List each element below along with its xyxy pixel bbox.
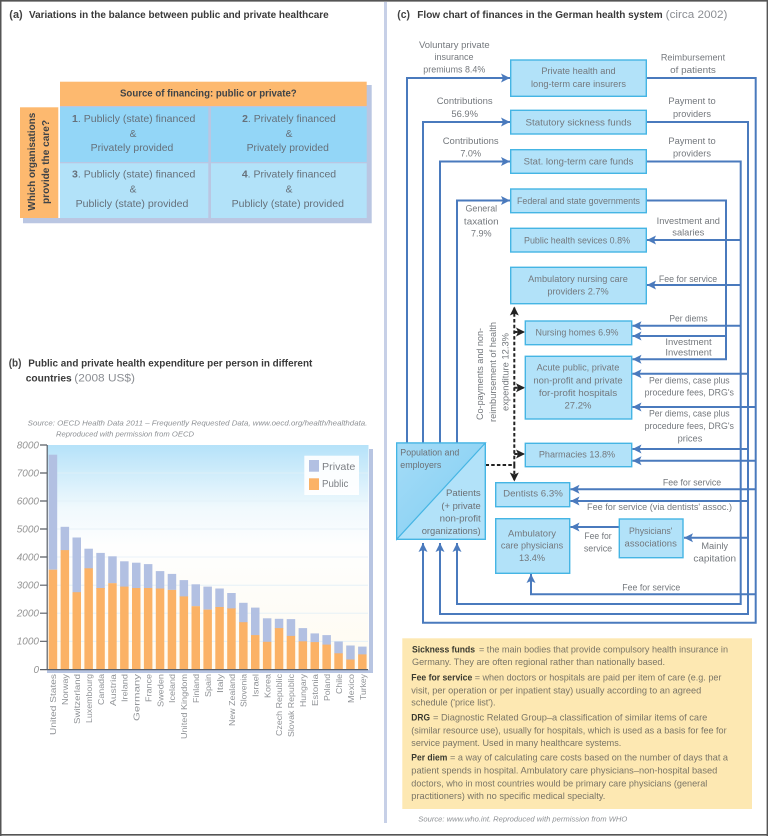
cell 3: & (130, 185, 137, 196)
box: private insurers: Private health and (541, 66, 616, 77)
box: hospitals: for-profit hospitals (539, 388, 617, 399)
dashed co-payment arrows (486, 306, 525, 482)
y axis labels: 4000 (17, 552, 39, 564)
box: population and patients: organizations) (422, 526, 481, 537)
country labels: Canada (96, 674, 106, 705)
country labels: France (144, 674, 154, 702)
arrow: sickness fund contributions (423, 122, 510, 443)
flow labels left: General (465, 204, 497, 215)
glossary: fee for service: = when doctors or hospitals are paid per item of care (e.g. per (475, 673, 721, 683)
box: pharmacies (525, 443, 632, 467)
box: physicians associations: Physicians' (629, 526, 672, 537)
heading (a): Variations in the balance between public and private healthcare (29, 9, 329, 21)
flow labels right: prices (678, 434, 703, 445)
flow labels left: taxation (464, 216, 499, 227)
box: physicians associations (619, 519, 683, 558)
box: hospitals: Acute public, private (537, 363, 619, 374)
box: population and patients: Population and (400, 447, 459, 458)
glossary callout (402, 638, 752, 809)
y axis labels (16, 440, 39, 676)
arrow: public health services (647, 239, 741, 241)
heading (b): countries (26, 372, 72, 384)
arrow: long-term care payments (457, 162, 741, 604)
box: pharmacies: Pharmacies 13.8% (539, 450, 616, 461)
flow labels right: Fee for service (663, 477, 721, 488)
arrow: long-term care contributions (440, 162, 510, 443)
box: nursing homes (525, 321, 632, 345)
flow labels right: Fee for service (659, 274, 717, 285)
box: governments (511, 189, 646, 213)
matrix row header: Which organisations (27, 112, 38, 211)
arrow: sickness fund payments (440, 122, 748, 614)
heading (b): (b) (9, 358, 22, 370)
flow labels right: providers (673, 109, 711, 120)
box: nursing homes: Nursing homes 6.9% (536, 328, 619, 339)
arrow: pharmacies 2 (632, 460, 756, 462)
country labels: New Zealand (227, 674, 237, 726)
flow labels right: Fee for (584, 531, 612, 542)
box: hospitals (525, 356, 632, 419)
heading (c): (c) (397, 9, 410, 21)
arrow: fee for service to physicians (531, 574, 756, 594)
glossary: DRG: DRG (411, 712, 430, 722)
glossary: sickness funds: = the main bodies that provide compulsory health insurance in (479, 645, 728, 655)
cell 3: 3. Publicly (state) financed (72, 170, 196, 181)
flow labels left: Contributions (437, 96, 493, 107)
arrow: dentists association fee (570, 500, 748, 502)
box: population and patients: employers (400, 460, 441, 471)
y axis labels: 5000 (17, 524, 39, 536)
flow labels left: insurance (434, 52, 474, 63)
country labels: Sweden (156, 674, 166, 707)
box: statutory sickness funds (511, 110, 646, 134)
matrix shadow (23, 85, 372, 223)
flow labels left: Voluntary private (419, 40, 490, 51)
country labels: Iceland (167, 674, 177, 703)
flow labels right: of patients (670, 65, 716, 76)
country labels: Czech Republic (274, 673, 284, 736)
panel: (c) flow chart (397, 9, 756, 824)
private bars (49, 455, 367, 660)
arrow: pharmacies 1 (632, 448, 748, 450)
heading (c): (circa 2002) (666, 9, 727, 21)
box: population and patients (397, 443, 485, 539)
box: ambulatory nursing: Ambulatory nursing care (528, 274, 628, 285)
rotated co-payments label: Co-payments and non- (475, 328, 486, 420)
panel: (a) public/private matrix (9, 9, 372, 223)
country labels: United States (48, 674, 58, 735)
box: population and patients: Patients (446, 488, 481, 499)
cell 4 (211, 163, 367, 218)
flow labels right (584, 53, 736, 593)
cell 4: & (286, 185, 293, 196)
flow labels right: Payment to (668, 136, 716, 147)
flow labels left: 7.0% (460, 149, 481, 160)
glossary: DRG (411, 712, 727, 748)
cell 4: 4. Privately financed (242, 170, 336, 181)
box: dentists: Dentists 6.3% (503, 489, 563, 500)
y axis labels: 3000 (17, 580, 39, 592)
axes (40, 445, 368, 670)
glossary: DRG: = Diagnostic Related Group–a classification of similar items of care (433, 712, 707, 722)
country labels: Slovak Republic (286, 673, 296, 737)
arrow: hospital per diems 2 (632, 406, 756, 408)
country labels: Spain (203, 674, 213, 697)
cell 2: Privately provided (247, 143, 329, 154)
box: ambulatory physicians: Ambulatory (508, 528, 556, 539)
country labels: Luxembourg (84, 674, 94, 723)
glossary: sickness funds: Germany. They are often regional rather than nationally based. (412, 657, 665, 667)
flow labels right: Investment and (657, 216, 720, 227)
country labels: Switzerland (72, 674, 82, 724)
glossary: per diem: Per diem (411, 753, 447, 763)
arrow: voluntary premiums (407, 78, 510, 443)
flow labels right: procedure fees, DRG's (645, 388, 734, 399)
legend: Public (322, 478, 348, 490)
country labels: Korea (262, 674, 272, 698)
country labels: Norway (60, 673, 70, 705)
matrix row header (20, 107, 58, 218)
arrow: government investment to hospitals (632, 200, 726, 359)
glossary: per diem: = a way of calculating care costs based on the number of days that a (450, 753, 729, 763)
legend (304, 456, 359, 495)
matrix header (60, 82, 367, 106)
cell 3: Publicly (state) provided (76, 199, 189, 210)
cell 1: Privately provided (91, 143, 174, 154)
box: private insurers: long-term care insurers (531, 79, 626, 90)
arrow: nursing home per diems (632, 325, 741, 327)
flow labels left: Contributions (443, 136, 499, 147)
country labels: Italy (215, 673, 225, 693)
flow labels right: providers (673, 149, 711, 160)
cell 1: 1. Publicly (state) financed (72, 114, 196, 125)
glossary: per diem: patient spends in hospital. Ambulatory care physicians–non-hospital based (411, 766, 717, 776)
arrow: dentists fee (570, 488, 756, 490)
box: dentists (496, 483, 570, 507)
glossary: per diem: doctors, who in most countries would be primary care physicians (general (411, 778, 707, 788)
box: ambulatory nursing: providers 2.7% (547, 287, 609, 298)
source note: Source: OECD Health Data 2011 – Frequently Requested Data, www.oecd.org/health/healthdata. (28, 419, 367, 428)
country labels: Germany (132, 673, 142, 721)
country labels: Ireland (120, 674, 130, 702)
glossary: fee for service (411, 673, 721, 708)
arrow: physicians association capitation (684, 537, 748, 539)
cell 3 (60, 163, 208, 218)
flow labels right: capitation (693, 554, 736, 565)
heading (b): Public and private health expenditure per person in different (28, 358, 313, 370)
box: ambulatory physicians (496, 519, 570, 573)
flow labels right: Investment (665, 347, 712, 358)
y axis labels: 0 (33, 665, 39, 676)
country labels: Finland (191, 674, 201, 703)
flow labels right: salaries (672, 228, 704, 239)
box: population and patients: (+ private (441, 501, 481, 512)
flow labels right: Reimbursement (661, 53, 725, 64)
source note (28, 419, 367, 439)
WHO source note: Source: www.who.int. Reproduced with permission from WHO (418, 815, 627, 824)
flow labels right: Investment (665, 337, 712, 348)
box: population and patients: non-profit (440, 513, 481, 524)
country labels: Israel (250, 674, 260, 697)
flow labels right: Per diems, case plus (649, 408, 730, 419)
box: private insurers (511, 60, 646, 96)
glossary: DRG: (similar resource use), usually for hospitals, which is used as a basis for fee for (411, 725, 727, 735)
arrow: reimbursement of patients (423, 78, 756, 623)
arrow: general taxation (457, 200, 510, 443)
flow labels right: Payment to (668, 96, 716, 107)
flow labels left (419, 40, 499, 240)
box: long-term care funds (511, 150, 646, 173)
rotated co-payments label: expenditure 12.3% (500, 333, 512, 411)
box: long-term care funds: Stat. long-term care funds (524, 157, 634, 168)
box: ambulatory nursing (511, 267, 646, 304)
country labels: Mexico (346, 674, 356, 703)
country labels: Turkey (358, 673, 368, 700)
box: hospitals: 27.2% (564, 400, 592, 411)
glossary: per diem (411, 753, 729, 801)
y axis labels: 2000 (16, 608, 39, 620)
flow lines and arrows (407, 78, 756, 623)
flow labels right: Mainly (701, 541, 728, 552)
box: governments: Federal and state governments (517, 196, 640, 207)
box: public health services: Public health sevices 0.8% (524, 235, 630, 246)
bar chart (16, 440, 373, 739)
box: public health services (511, 228, 646, 252)
box: physicians associations: associations (625, 538, 677, 549)
y axis labels: 8000 (17, 440, 39, 452)
country labels: Estonia (310, 674, 320, 706)
arrow: hospital per diems 1 (632, 373, 748, 375)
arrow: associations to physicians (570, 526, 619, 528)
flow labels right: Per diems (669, 313, 708, 324)
arrow: investment to nursing homes (632, 335, 726, 337)
country labels: Hungary (298, 673, 308, 707)
flow labels left: 56.9% (451, 109, 479, 120)
cell 1 (60, 107, 208, 162)
flow labels left: premiums 8.4% (423, 65, 486, 76)
glossary: sickness funds (412, 645, 728, 667)
glossary: per diem: practitioners) with no specific medical specialty. (411, 791, 605, 801)
country labels: Slovenia (238, 674, 248, 707)
legend: Private (322, 461, 355, 473)
flow labels right: Fee for service (via dentists' assoc.) (587, 502, 732, 513)
panel: (b) expenditure chart (9, 358, 373, 739)
box: hospitals: non-profit and private (533, 375, 623, 386)
rotated co-payments label: reimbursement of health (488, 322, 499, 422)
y axis labels: 6000 (17, 496, 39, 508)
y axis labels: 1000 (17, 636, 39, 648)
cell 2 (211, 107, 367, 162)
glossary: fee for service: visit, per operation or per inpatient stay) usually according to an agreed (411, 685, 701, 695)
glossary: sickness funds: Sickness funds (412, 645, 475, 655)
heading (a): (a) (9, 9, 23, 21)
flow labels right: Fee for service (622, 582, 680, 593)
glossary: fee for service: schedule ('price list'). (411, 698, 496, 708)
y axis labels: 7000 (17, 468, 39, 480)
country labels: Austria (108, 674, 118, 706)
cell 4: Publicly (state) provided (232, 199, 344, 210)
rotated co-payments label (475, 322, 512, 422)
flow labels right: service (584, 544, 612, 555)
arrow: ambulatory nursing (647, 284, 741, 286)
matrix row header: provide the care? (41, 120, 52, 204)
country labels: Chile (334, 674, 344, 694)
cell 2: 2. Privately financed (242, 114, 336, 125)
cell 2: & (286, 129, 293, 140)
box: statutory sickness funds: Statutory sickness funds (526, 117, 632, 128)
country labels (48, 673, 368, 739)
glossary: DRG: service payment. Used in many healthcare systems. (411, 738, 621, 748)
source note: Reproduced with permission from OECD (56, 430, 195, 439)
flow labels left: 7.9% (471, 229, 492, 240)
country labels: United Kingdom (179, 674, 189, 739)
cell 1: & (130, 129, 137, 140)
heading (b) (9, 358, 313, 384)
country labels: Poland (322, 674, 332, 701)
flow labels right: Per diems, case plus (649, 375, 730, 386)
flow labels right: procedure fees, DRG's (645, 421, 734, 432)
heading (c): Flow chart of finances in the German health system (417, 9, 663, 21)
box: ambulatory physicians: care physicians (501, 541, 563, 552)
public bars (49, 550, 367, 669)
glossary: fee for service: Fee for service (411, 673, 472, 683)
heading (b): (2008 US$) (74, 372, 135, 384)
box: ambulatory physicians: 13.4% (519, 553, 545, 564)
matrix header: Source of financing: public or private? (120, 89, 297, 100)
